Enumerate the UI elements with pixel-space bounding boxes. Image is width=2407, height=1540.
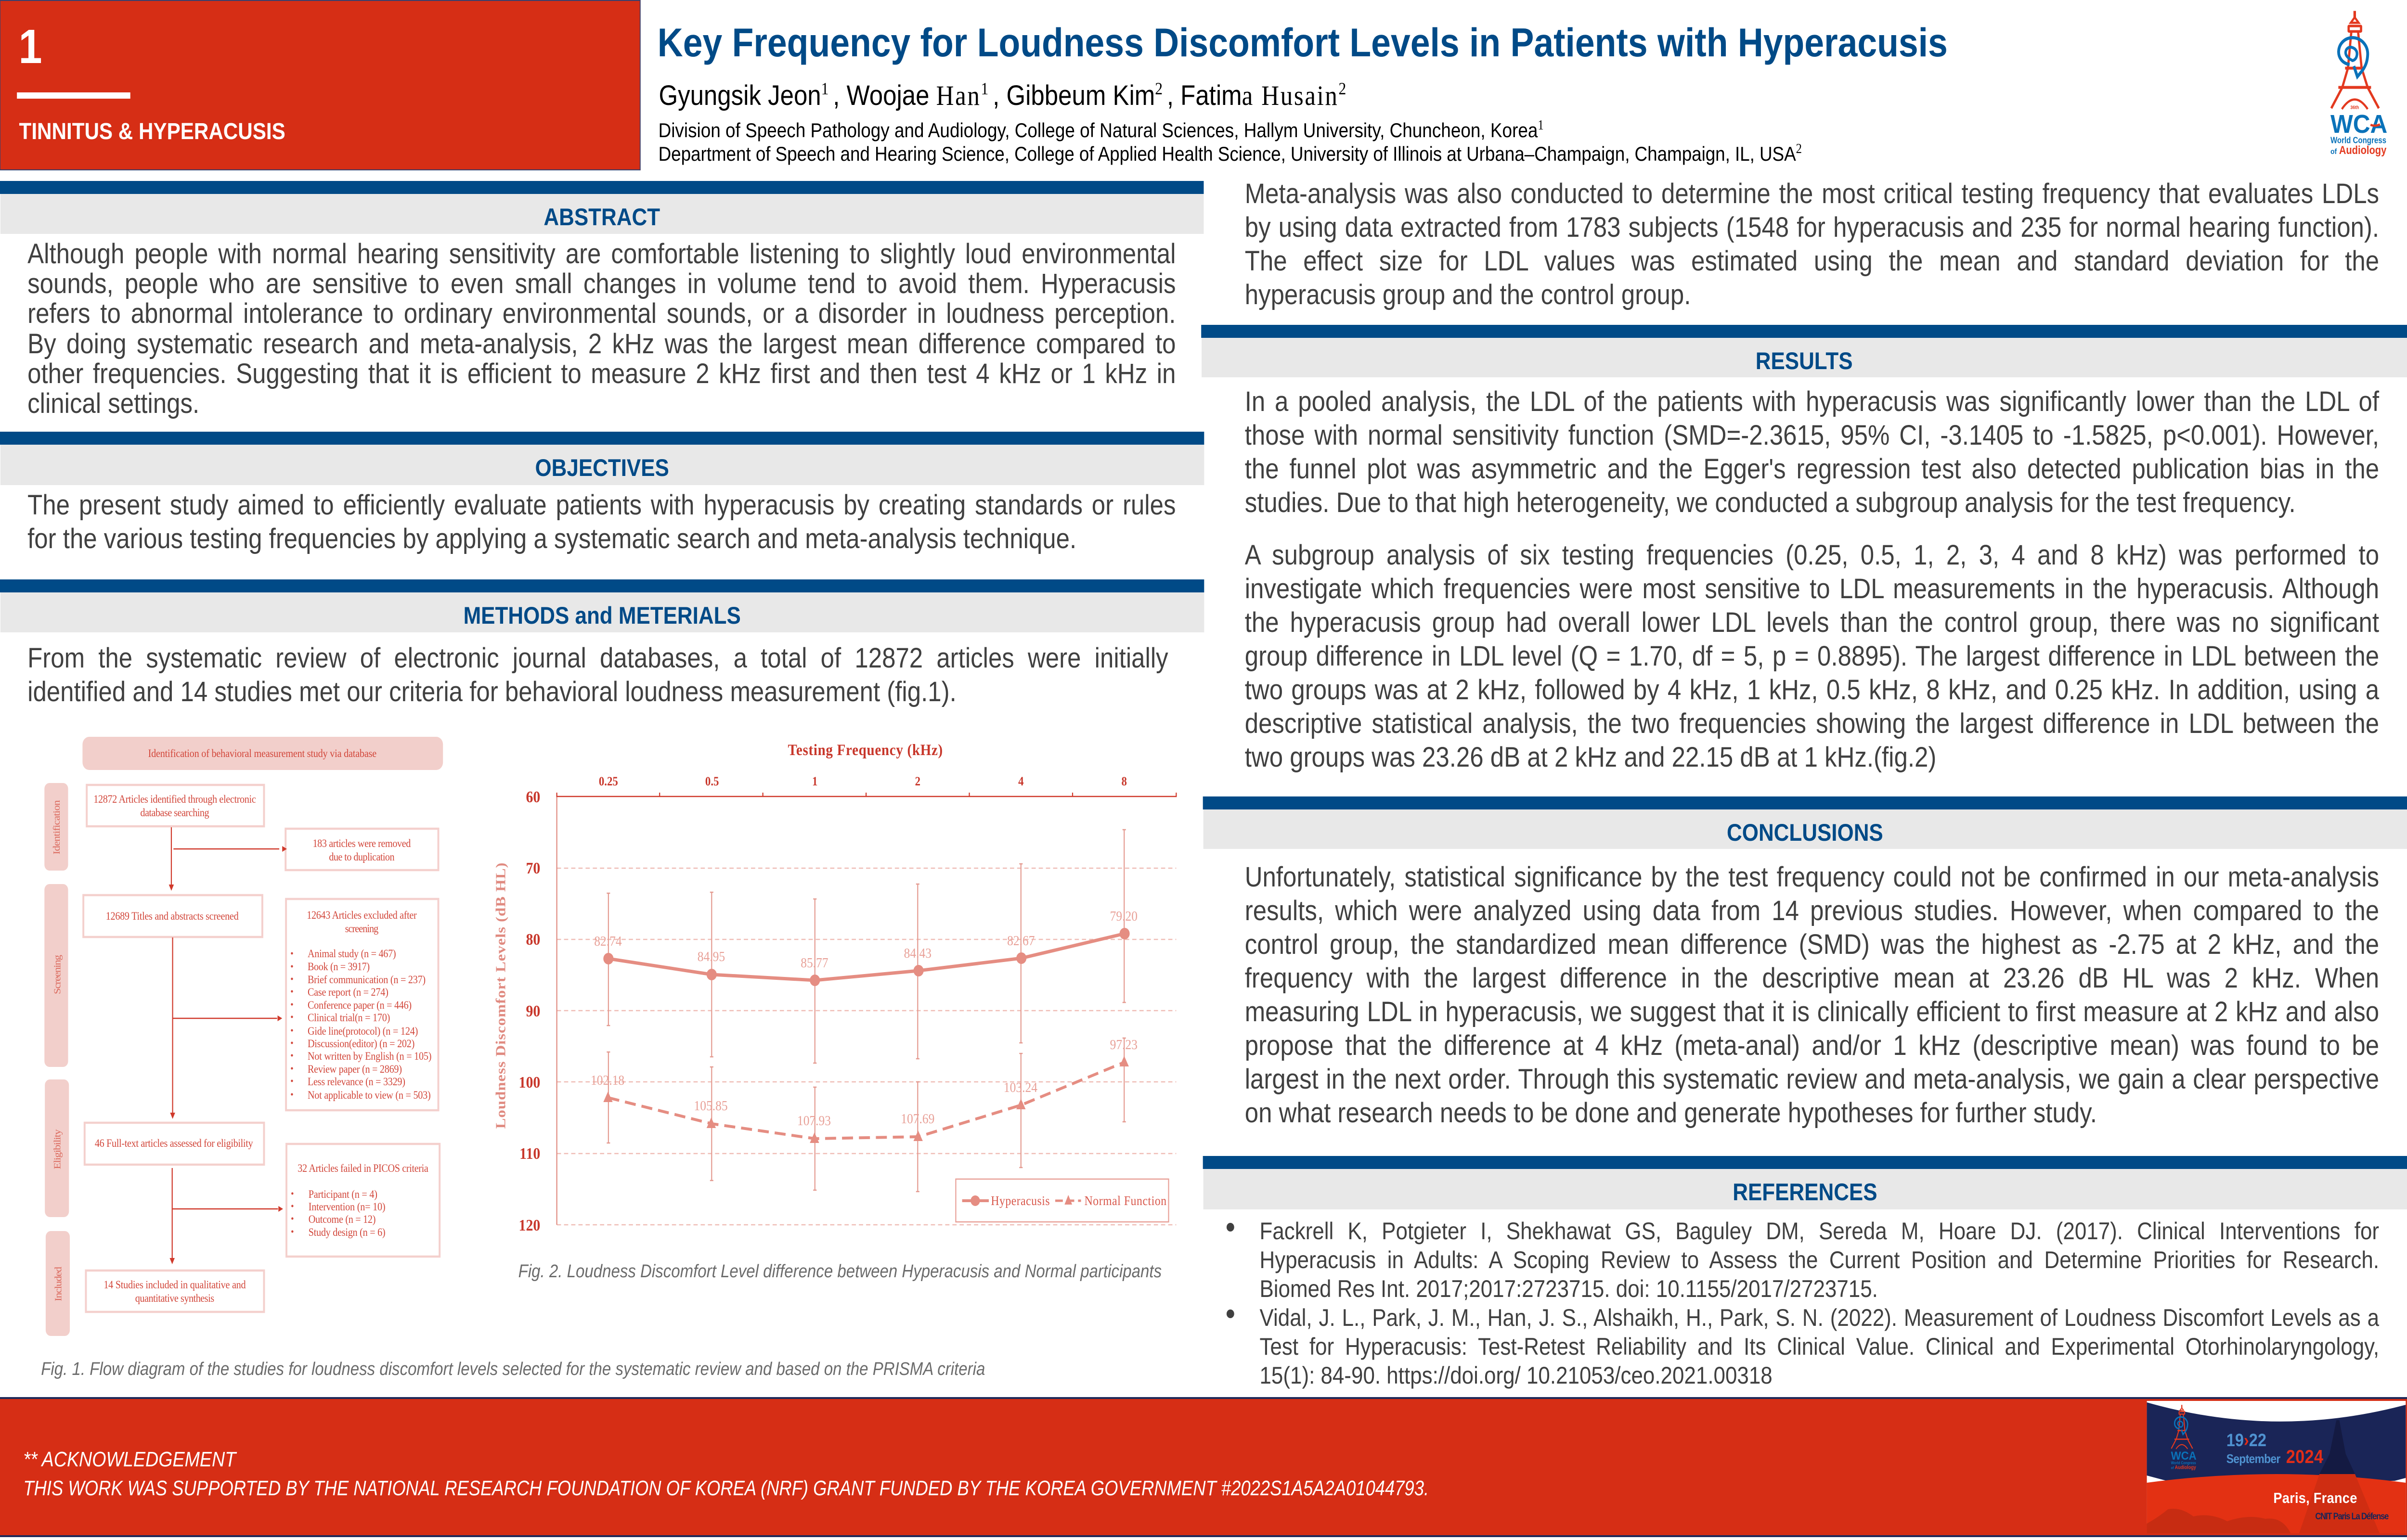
flow diagram: 32 Articles failed in PICOS criteria: [298, 1162, 428, 1174]
flow diagram: Screening: [52, 955, 63, 994]
footer red band: [0, 1397, 2407, 1537]
line chart: LDL by frequency: 1: [812, 775, 817, 788]
methods text continued: by using data extracted from 1783 subjects (1548 for hyperacusis and 235 for normal hearing function).: [1245, 212, 2379, 243]
line chart: LDL by frequency: 79.20: [1110, 909, 1138, 924]
line chart: LDL by frequency: 102.18: [591, 1073, 624, 1088]
conference banner: Audiology: [2175, 1465, 2196, 1471]
line chart: LDL by frequency: 70: [526, 859, 540, 877]
results text 1: the funnel plot was asymmetric and the Egger's regression test also detected publication bias in the: [1245, 453, 2379, 485]
line chart: LDL by frequency: 82.74: [594, 934, 622, 949]
results text 2: group difference in LDL level (Q = 1.70, df = 5, p = 0.8895). The largest difference in LDL between the: [1245, 641, 2379, 672]
flow diagram: [0, 0, 466, 1348]
line chart: LDL by frequency: 60: [526, 787, 540, 806]
line chart: LDL by frequency: 105.85: [694, 1098, 728, 1113]
objectives text: for the various testing frequencies by applying a systematic search and meta-analysis technique.: [27, 523, 1076, 554]
icon: WCA logo: 36th: [2350, 104, 2359, 110]
flow diagram: 12643 Articles excluded after: [307, 909, 417, 921]
panel: results heading: RESULTS: [1756, 347, 1853, 374]
flow diagram: quantitative synthesis: [135, 1292, 214, 1304]
conference banner: 19›22: [2226, 1430, 2266, 1450]
session name: TINNITUS & HYPERACUSIS: [19, 119, 285, 144]
conference banner: of: [2171, 1466, 2174, 1470]
panel: objectives heading: OBJECTIVES: [535, 454, 669, 481]
flow diagram: Gide line(protocol) (n = 124): [308, 1025, 418, 1037]
figure 1 caption: Fig. 1. Flow diagram of the studies for loudness discomfort levels selected for the systematic review and based on the PRISMA criteria: [41, 1359, 985, 1379]
abstract text: [27, 238, 1176, 419]
panel: objectives heading: [0, 432, 1204, 485]
line chart: LDL by frequency: 84.43: [904, 946, 932, 961]
abstract text: other frequencies. Suggesting that it is efficient to measure 2 kHz first and then test 4 kHz or 1 kHz in: [27, 358, 1176, 389]
flow diagram: Outcome (n = 12): [309, 1213, 375, 1225]
references text: Hyperacusis in Adults: A Scoping Review to Assess the Current Position and Determine Priorities for Research.: [1259, 1246, 2379, 1273]
flow diagram: database searching: [140, 807, 209, 819]
conference banner: Paris, France: [2273, 1490, 2357, 1506]
abstract text: clinical settings.: [27, 388, 199, 419]
objectives text: [27, 489, 1176, 554]
panel: conclusions heading: CONCLUSIONS: [1727, 819, 1883, 846]
conclusions text: propose that the difference at 4 kHz (meta-anal) and/or 1 kHz (descriptive mean) was found to be: [1245, 1030, 2379, 1061]
results text 2: two groups was 23.26 dB at 2 kHz and 22.15 dB at 1 kHz.(fig.2): [1245, 742, 1936, 773]
line chart: LDL by frequency: 0.5: [705, 775, 719, 788]
references text: 15(1): 84-90. https://doi.org/ 10.21053/ceo.2021.00318: [1259, 1362, 1773, 1389]
flow diagram: Intervention (n= 10): [309, 1201, 386, 1213]
line chart: LDL by frequency: 110: [519, 1144, 540, 1162]
flow diagram: Clinical trial(n = 170): [308, 1012, 390, 1024]
panel: results heading: [1201, 325, 2407, 377]
line chart: LDL by frequency: 107.69: [901, 1111, 934, 1126]
line chart: LDL by frequency: 120: [519, 1216, 540, 1234]
references text: Biomed Res Int. 2017;2017:2723715. doi: 10.1155/2017/2723715.: [1259, 1275, 1878, 1302]
methods text continued: hyperacusis group and the control group.: [1245, 279, 1691, 310]
flow diagram: Conference paper (n = 446): [308, 999, 412, 1011]
flow diagram: Brief communication (n = 237): [308, 974, 426, 986]
flow diagram: screening: [345, 923, 378, 935]
session number: 1: [19, 20, 42, 74]
flow diagram: Included: [53, 1267, 64, 1301]
abstract text: refers to abnormal intolerance to ordinary environmental sounds, or a disorder in loudness perception.: [27, 298, 1176, 329]
figure 2 caption: Fig. 2. Loudness Discomfort Level difference between Hyperacusis and Normal participants: [518, 1261, 1162, 1281]
icon: WCA logo: [2330, 11, 2387, 156]
flow diagram: 12872 Articles identified through electronic: [93, 793, 256, 805]
methods text continued: The effect size for LDL values was estimated using the mean and standard deviation for the: [1245, 245, 2379, 277]
panel: methods heading: METHODS and METERIALS: [464, 602, 741, 629]
title: Key Frequency for Loudness Discomfort Levels in Patients with Hyperacusis: [658, 20, 1948, 65]
panel: abstract heading: [0, 181, 1204, 234]
references text: [1259, 1217, 2379, 1390]
conclusions text: on what research needs to be done and generate hypotheses for further study.: [1245, 1097, 2097, 1129]
affiliation 2: Department of Speech and Hearing Science, College of Applied Health Science, University of Illinois at Urbana–Champaign, Champaign, IL, USA2: [659, 141, 1802, 165]
methods text continued: Meta-analysis was also conducted to determine the most critical testing frequency that evaluates LDLs: [1245, 178, 2379, 209]
conclusions text: control group, the standardized mean difference (SMD) was the highest as -2.75 at 2 kHz, and the: [1245, 929, 2379, 960]
icon: WCA logo: of: [2330, 147, 2337, 156]
results text 1: those with normal sensitivity function (SMD=-2.3615, 95% CI, -3.1405 to -1.5825, p<0.001). However,: [1245, 420, 2379, 451]
flow diagram: Discussion(editor) (n = 202): [308, 1038, 414, 1050]
conference banner: [2147, 1401, 2406, 1533]
line chart: LDL by frequency: 8: [1122, 775, 1127, 788]
results text 1: In a pooled analysis, the LDL of the patients with hyperacusis was significantly lower than the LDL of: [1245, 386, 2379, 417]
references text: Test for Hyperacusis: Test-Retest Reliability and Its Clinical Value. Clinical and Experimental Otorhinolaryngology,: [1259, 1333, 2379, 1360]
conclusions text: measuring LDL in hyperacusis, we suggest that it is clinically efficient to first measure at 2 kHz and also: [1245, 996, 2379, 1027]
flow diagram: Less relevance (n = 3329): [308, 1076, 405, 1088]
panel: abstract heading: ABSTRACT: [544, 204, 660, 231]
abstract text: sounds, people who are sensitive to even small changes in volume tend to avoid them. Hyperacusis: [27, 268, 1176, 299]
results text 2: investigate which frequencies were most sensitive to LDL measurements in the hyperacusis. Although: [1245, 573, 2379, 604]
flow diagram: 12689 Titles and abstracts screened: [106, 910, 239, 922]
line chart: LDL by frequency: 103.24: [1004, 1080, 1037, 1095]
conclusions text: Unfortunately, statistical significance by the test frequency could not be confirmed in our meta-analysis: [1245, 861, 2379, 893]
results text 2: two groups was at 2 kHz, followed by 4 kHz, 1 kHz, 0.5 kHz, 8 kHz, and 0.25 kHz. In addition, using a: [1245, 674, 2379, 706]
conclusions text: largest in the next order. Through this systematic review and meta-analysis, we gain a clear perspective: [1245, 1064, 2379, 1095]
line chart: LDL by frequency: 0.25: [599, 775, 618, 788]
objectives text: The present study aimed to efficiently evaluate patients with hyperacusis by creating standards or rules: [27, 489, 1176, 521]
conference banner: 2024: [2286, 1446, 2324, 1467]
line chart: LDL by frequency: Loudness Discomfort Levels (dB HL): [492, 862, 508, 1129]
line chart: LDL by frequency: 2: [915, 775, 920, 788]
icon: WCA logo: WCA: [2330, 109, 2387, 139]
conclusions text: frequency with the largest difference in the descriptive mean at 23.26 dB HL was 2 kHz. When: [1245, 962, 2379, 994]
abstract text: By doing systematic research and meta-analysis, 2 kHz was the largest mean difference compared to: [27, 328, 1176, 359]
flow diagram: Animal study (n = 467): [308, 948, 396, 960]
results text 1: studies. Due to that high heterogeneity, we conducted a subgroup analysis for the test frequency.: [1245, 487, 2296, 518]
flow diagram: Review paper (n = 2869): [308, 1063, 402, 1075]
panel: methods heading: [0, 579, 1204, 632]
line chart: LDL by frequency: [0, 0, 1185, 1299]
abstract text: Although people with normal hearing sensitivity are comfortable listening to slightly loud environmental: [27, 238, 1176, 270]
line chart: LDL by frequency: Normal Function: [1085, 1194, 1166, 1208]
conference banner: CNIT Paris La Défense: [2315, 1511, 2389, 1521]
panel: conclusions heading: [1203, 796, 2407, 849]
session divider bar: [17, 92, 130, 99]
flow diagram: 14 Studies included in qualitative and: [104, 1279, 246, 1291]
methods text: [27, 642, 1168, 707]
line chart: LDL by frequency: 80: [526, 930, 540, 948]
results text 1: [1245, 385, 2379, 520]
acknowledgement text: THIS WORK WAS SUPPORTED BY THE NATIONAL RESEARCH FOUNDATION OF KOREA (NRF) GRANT FUNDED BY THE KOREA GOVERNMENT #2022S1A5A2A01044793.: [23, 1476, 1429, 1500]
icon: WCA logo: Audiology: [2339, 144, 2387, 156]
line chart: LDL by frequency: 90: [526, 1001, 540, 1020]
acknowledgement heading: ** ACKNOWLEDGEMENT: [23, 1448, 236, 1471]
line chart: LDL by frequency: Hyperacusis: [991, 1194, 1050, 1208]
conference banner: September: [2226, 1452, 2281, 1466]
affiliation 1: Division of Speech Pathology and Audiology, College of Natural Sciences, Hallym University, Chuncheon, Korea1: [659, 118, 1544, 141]
flow diagram: Identification: [51, 800, 62, 855]
flow diagram: Eligibility: [52, 1129, 63, 1169]
results text 2: the hyperacusis group had overall lower LDL levels than the control group, there was no significant: [1245, 607, 2379, 638]
flow diagram: Identification of behavioral measurement study via database: [148, 747, 376, 759]
methods text: From the systematic review of electronic journal databases, a total of 12872 articles were initially: [27, 642, 1168, 674]
conclusions text: [1245, 860, 2379, 1130]
conference banner: WCA: [2171, 1449, 2197, 1462]
line chart: LDL by frequency: 82.67: [1007, 933, 1035, 948]
line chart: LDL by frequency: 97.23: [1110, 1037, 1138, 1052]
references text: Fackrell K, Potgieter I, Shekhawat GS, Baguley DM, Sereda M, Hoare DJ. (2017). Clinical Interventions for: [1259, 1218, 2379, 1245]
line chart: LDL by frequency: Testing Frequency (kHz): [788, 741, 943, 758]
bullet marks for references: [1223, 1218, 1238, 1323]
authors: Gyungsik Jeon1, Woojae Han1, Gibbeum Kim2, Fatima Husain2: [659, 79, 1346, 111]
line chart: LDL by frequency: 100: [519, 1073, 540, 1091]
line chart: LDL by frequency: 4: [1018, 775, 1023, 788]
flow diagram: 46 Full-text articles assessed for eligibility: [95, 1137, 253, 1149]
references text: Vidal, J. L., Park, J. M., Han, J. S., Alshaikh, H., Park, S. N. (2022). Measurement of Loudness Discomfort Levels as a: [1259, 1304, 2379, 1331]
results text 2: [1245, 539, 2379, 774]
icon: WCA logo: World Congress: [2330, 135, 2386, 145]
flow diagram: Not applicable to view (n = 503): [308, 1089, 431, 1101]
flow diagram: 183 articles were removed: [313, 837, 411, 849]
flow diagram: Case report (n = 274): [308, 986, 388, 998]
conclusions text: results, which were analyzed using data from 14 previous studies. However, when compared to the: [1245, 895, 2379, 926]
line chart: LDL by frequency: 107.93: [797, 1113, 831, 1128]
line chart: LDL by frequency: 84.95: [698, 949, 725, 964]
methods text continued: [1245, 177, 2379, 312]
panel: references heading: [1203, 1156, 2407, 1209]
header red panel: [0, 0, 641, 170]
flow diagram: Book (n = 3917): [308, 961, 370, 973]
flow diagram: due to duplication: [329, 851, 395, 863]
flow diagram: Study design (n = 6): [309, 1226, 386, 1238]
flow diagram: Not written by English (n = 105): [308, 1050, 431, 1062]
methods text: identified and 14 studies met our criteria for behavioral loudness measurement (fig.1).: [27, 676, 957, 707]
flow diagram: Participant (n = 4): [309, 1188, 377, 1200]
results text 2: A subgroup analysis of six testing frequencies (0.25, 0.5, 1, 2, 3, 4 and 8 kHz) was performed to: [1245, 539, 2379, 571]
results text 2: descriptive statistical analysis, the two frequencies showing the largest difference in LDL between the: [1245, 708, 2379, 739]
panel: references heading: REFERENCES: [1733, 1179, 1877, 1206]
line chart: LDL by frequency: 85.77: [801, 955, 828, 970]
